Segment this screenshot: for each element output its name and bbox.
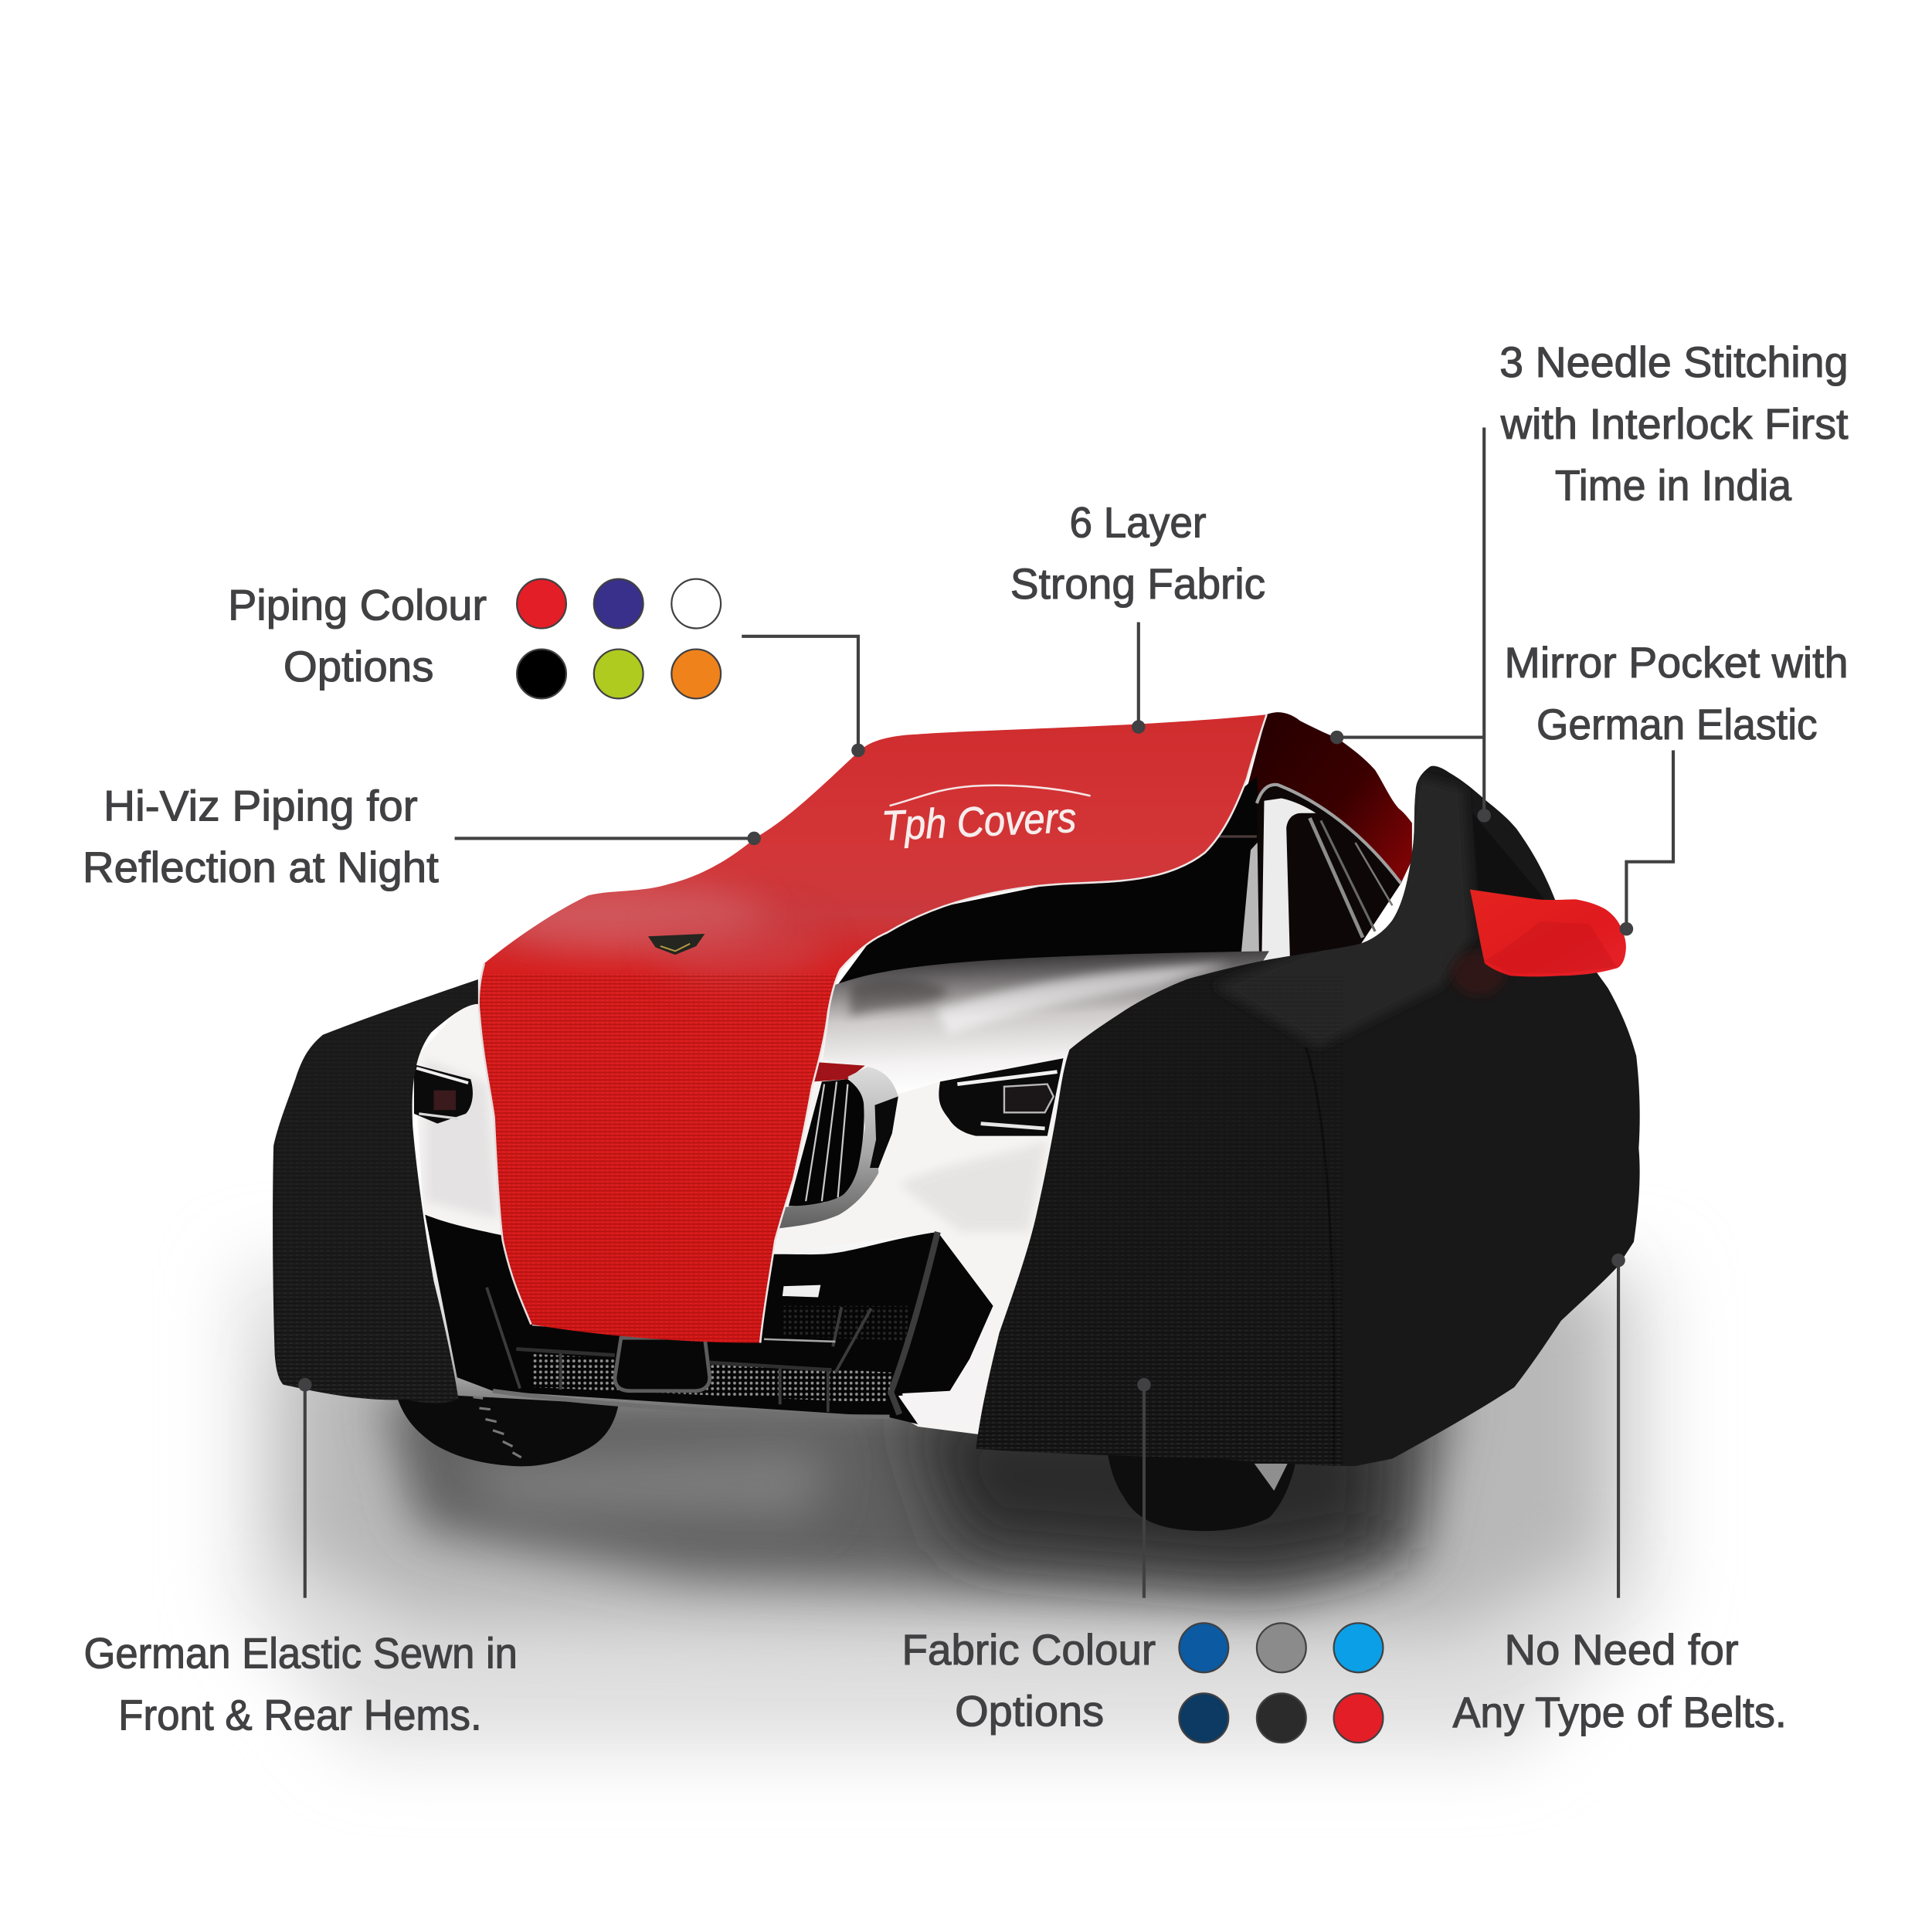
callout: german elastic hems: German Elastic Sewn in bbox=[83, 1629, 518, 1678]
car: right headlight bbox=[939, 1058, 1064, 1136]
slats bbox=[806, 1081, 847, 1201]
car: white body bbox=[414, 955, 1269, 1441]
swatches bbox=[1179, 1623, 1383, 1743]
black kidney bbox=[789, 1079, 864, 1206]
callout: 3 needle stitching: 3 Needle Stitching bbox=[1499, 338, 1849, 386]
label: Piping Colour bbox=[228, 580, 487, 629]
car: hood bbox=[823, 951, 1269, 1094]
label: Options bbox=[284, 642, 433, 691]
car: lower bumper intake bbox=[425, 1215, 993, 1424]
label: Options bbox=[955, 1687, 1104, 1736]
badge bbox=[648, 934, 705, 955]
callout: german elastic hems bbox=[83, 1378, 518, 1739]
callout: hi-viz piping: Hi-Viz Piping for bbox=[104, 781, 418, 830]
callout: 3 needle stitching bbox=[1330, 338, 1849, 823]
car: grille bbox=[779, 1062, 898, 1228]
callout: piping colour options bbox=[228, 579, 865, 757]
ground shadow bbox=[240, 1269, 1657, 1749]
callout: 6 layer fabric: 6 Layer bbox=[1069, 497, 1207, 546]
logo: Tph Covers: Tph Covers bbox=[881, 795, 1077, 850]
callout: hi-viz piping bbox=[83, 781, 761, 891]
label bbox=[902, 1625, 1156, 1736]
chrome kidney bbox=[779, 1067, 898, 1228]
black side of grille bbox=[870, 1097, 898, 1168]
callout: no need for belts: Any Type of Belts. bbox=[1453, 1688, 1787, 1736]
callout: 3 needle stitching: Time in India bbox=[1555, 461, 1792, 510]
right rear wheel bbox=[1108, 1454, 1296, 1531]
car: roof pillar and side windows bbox=[1257, 785, 1401, 963]
callout: 3 needle stitching: with Interlock First bbox=[1500, 399, 1849, 448]
leader line bbox=[1137, 1378, 1151, 1598]
car: wheels bbox=[396, 1392, 1296, 1531]
callout: german elastic hems: Front & Rear Hems. bbox=[118, 1690, 482, 1739]
callout: mirror pocket: Mirror Pocket with bbox=[1505, 638, 1849, 687]
leader line bbox=[742, 636, 865, 757]
bars bbox=[487, 1288, 871, 1412]
splitter bbox=[493, 1391, 890, 1417]
car: left side shading and headlight bbox=[414, 1060, 499, 1220]
label bbox=[228, 580, 487, 691]
callout: fabric colour options bbox=[902, 1378, 1383, 1743]
cover: left black panel bbox=[273, 979, 478, 1403]
callout: hi-viz piping: Reflection at Night bbox=[83, 843, 439, 891]
emblem bbox=[615, 1338, 710, 1391]
mesh bbox=[532, 1354, 892, 1403]
piping bbox=[479, 963, 531, 1325]
callout: no need for belts bbox=[1453, 1254, 1787, 1736]
cover: red band bbox=[468, 714, 1267, 1355]
cover: red mirror pocket bbox=[1470, 890, 1626, 976]
car: right fender shading bbox=[899, 1139, 1047, 1232]
label: Fabric Colour bbox=[902, 1625, 1156, 1674]
callout: mirror pocket: German Elastic bbox=[1536, 700, 1818, 748]
cover: right black panel bbox=[973, 766, 1640, 1478]
callout: mirror pocket bbox=[1505, 638, 1849, 935]
swatches bbox=[517, 579, 721, 698]
callout: no need for belts: No Need for bbox=[1505, 1625, 1739, 1674]
callout: 6 layer fabric bbox=[1010, 497, 1265, 734]
cover: underside bbox=[1247, 712, 1412, 887]
car: dark cabin behind the cover bbox=[828, 776, 1267, 998]
callout: 6 layer fabric: Strong Fabric bbox=[1010, 559, 1265, 608]
red strip bbox=[813, 1062, 865, 1081]
left front wheel bbox=[396, 1392, 619, 1466]
upper lighter fabric bbox=[1214, 776, 1472, 1047]
